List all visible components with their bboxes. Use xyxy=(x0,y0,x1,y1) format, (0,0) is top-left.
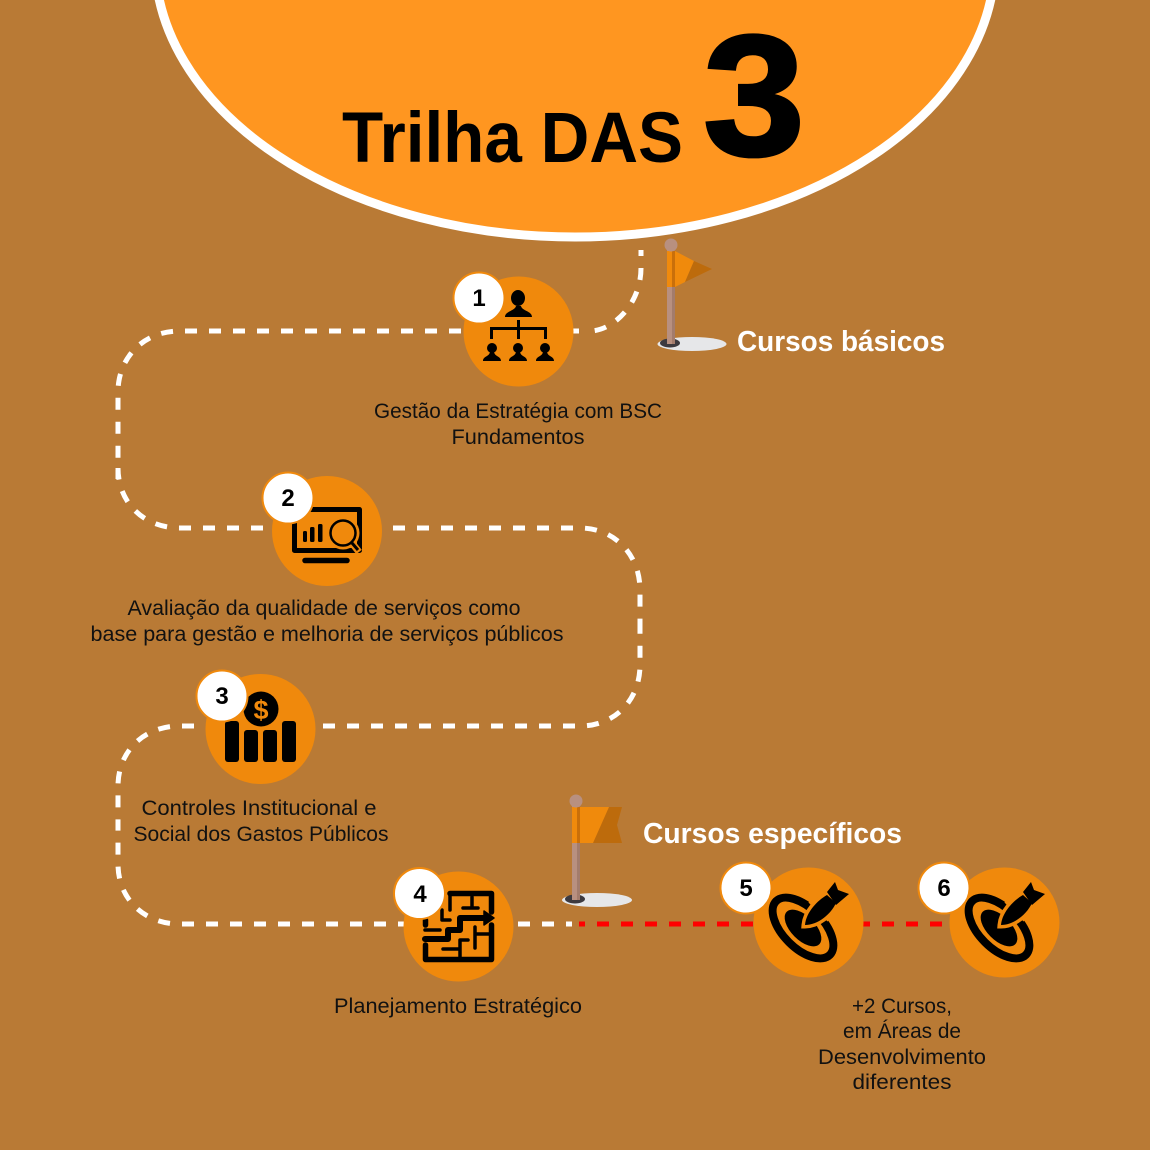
icon: money bar chart: $ xyxy=(253,695,269,725)
badge 1: 1 xyxy=(472,285,486,312)
icon: target with missile xyxy=(762,882,849,969)
dashed path: basic courses xyxy=(118,250,641,924)
label: Cursos específicos: Cursos específicos xyxy=(643,818,902,850)
step 5 circle xyxy=(754,868,864,978)
title: Trilha DAS xyxy=(342,99,683,178)
step 3 xyxy=(196,670,316,784)
icon: monitor with magnifier xyxy=(294,510,360,560)
text: steps 5 and 6: diferentes xyxy=(852,1071,952,1094)
flag: specific courses xyxy=(562,794,632,907)
step 6 circle xyxy=(950,868,1060,978)
text: step 3 xyxy=(134,797,388,846)
title: 3 xyxy=(703,0,805,192)
badge 6 xyxy=(918,862,970,914)
text: steps 5 and 6: em Áreas de xyxy=(843,1020,961,1043)
badge 4: 4 xyxy=(413,881,427,908)
icon: org chart xyxy=(483,290,554,361)
step 1 circle xyxy=(464,276,574,386)
step 6 xyxy=(918,862,1060,978)
icon: maze xyxy=(425,893,494,960)
badge 5 xyxy=(720,862,772,914)
text: steps 5 and 6: +2 Cursos, xyxy=(852,995,952,1018)
icon: target with missile xyxy=(958,882,1045,969)
text: step 1: Fundamentos xyxy=(452,426,584,449)
header ellipse xyxy=(155,0,995,237)
step 4 xyxy=(394,868,514,982)
flag: basic courses xyxy=(658,238,726,351)
text: step 1: Gestão da Estratégia com BSC xyxy=(374,400,662,423)
text: step 2 xyxy=(90,597,564,646)
text: step 2: base para gestão e melhoria de serviços públicos xyxy=(90,623,564,646)
text: step 3: Social dos Gastos Públicos xyxy=(134,823,388,846)
text: step 4: Planejamento Estratégico xyxy=(334,995,582,1018)
text: steps 5 and 6 xyxy=(818,995,986,1094)
label: Cursos básicos: Cursos básicos xyxy=(737,326,945,358)
text: steps 5 and 6: Desenvolvimento xyxy=(818,1046,986,1069)
badge 5: 5 xyxy=(739,875,753,902)
dashed path: specific courses xyxy=(579,922,942,926)
step 4 circle xyxy=(404,872,514,982)
text: step 2: Avaliação da qualidade de serviços como xyxy=(128,597,520,620)
step 1 xyxy=(454,272,574,386)
step 3 circle xyxy=(206,674,316,784)
badge 3: 3 xyxy=(215,683,229,710)
badge 2: 2 xyxy=(281,485,295,512)
text: step 1 xyxy=(374,400,662,449)
title xyxy=(342,0,805,192)
step 2 xyxy=(262,472,382,586)
step 2 circle xyxy=(272,476,382,586)
text: step 3: Controles Institucional e xyxy=(142,797,376,820)
badge 6: 6 xyxy=(937,875,951,902)
step 5 xyxy=(720,862,864,978)
